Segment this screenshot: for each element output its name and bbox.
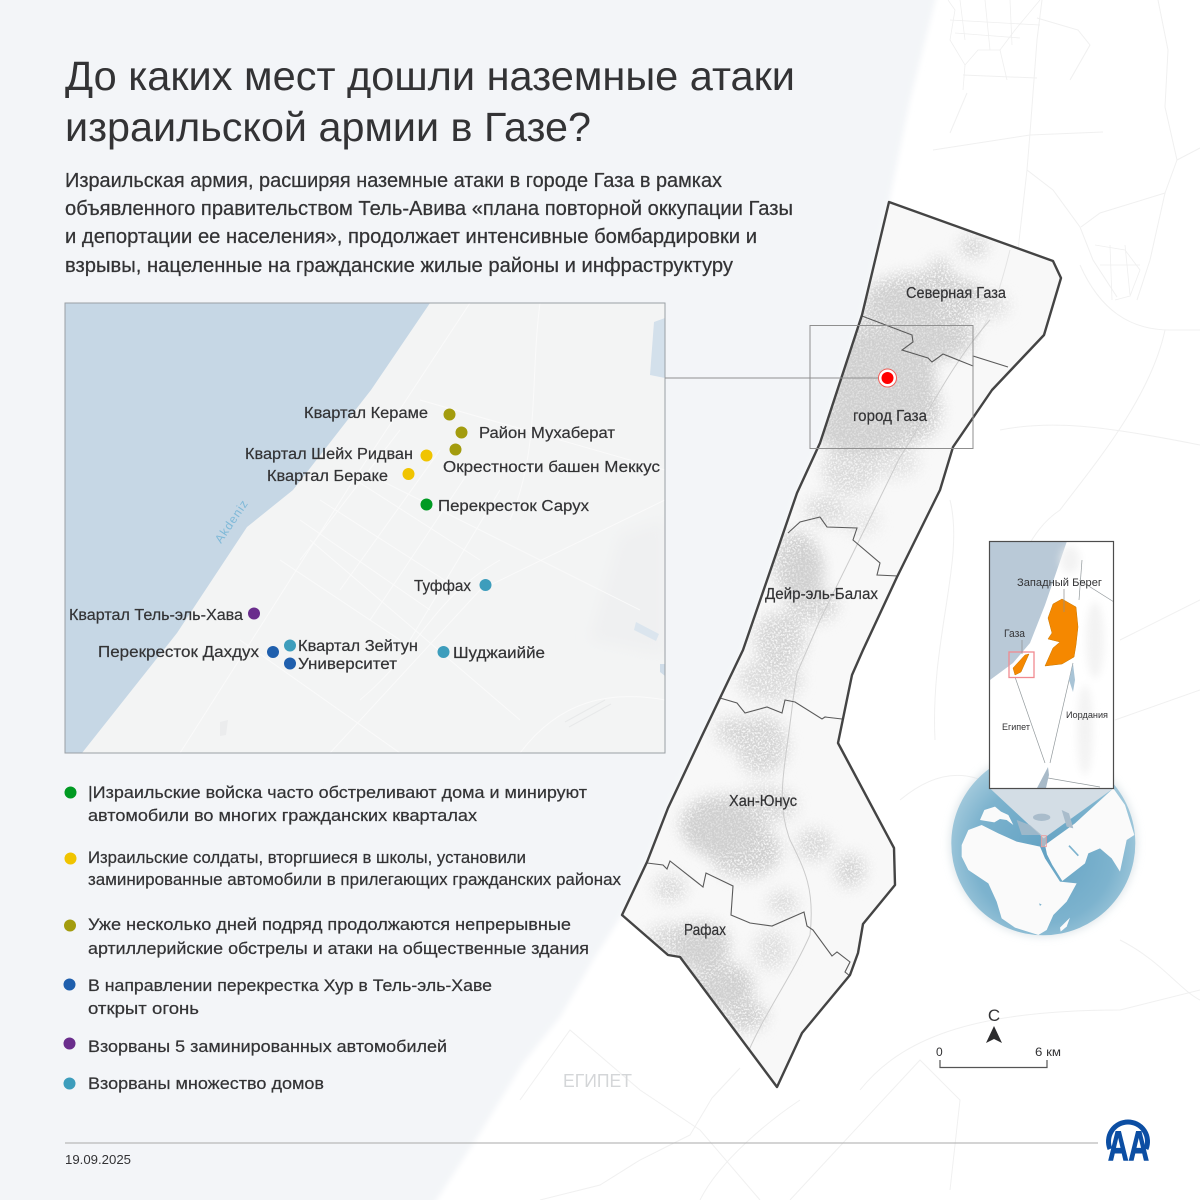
- logo: Anadolu Agency: AA: [1108, 1122, 1149, 1170]
- district boundaries: [647, 316, 1008, 976]
- panel: detail map of Gaza city: [65, 303, 665, 753]
- icon: West Bank: [1045, 599, 1078, 666]
- district labels: Дейр-эль-Балах: [765, 586, 878, 603]
- legend item: blue: [64, 976, 492, 1018]
- subtitle text: Израильская армия, расширяя наземные атаки в городе Газа в рамках: [65, 170, 722, 192]
- locator map: Иордания: [1066, 710, 1108, 720]
- title: [65, 53, 795, 150]
- scale bar: 0: [936, 1045, 943, 1059]
- background land roads: [520, 0, 1200, 1200]
- legend item: blue: открыт огонь: [88, 999, 199, 1018]
- marker: Mukhaberat: Район Мухаберат: [479, 425, 615, 442]
- inset sea: [65, 303, 430, 753]
- legend item: yellow: Израильские солдаты, вторгшиеся в школы, установили: [88, 848, 526, 867]
- scale bar: 6 км: [1035, 1045, 1061, 1059]
- subtitle text: [65, 170, 793, 277]
- marker: Mecca towers: [443, 444, 660, 476]
- legend item: yellow: заминированные автомобили в прилегающих гражданских районах: [88, 870, 621, 889]
- legend item: blue: В направлении перекрестка Хур в Тель-эль-Хаве: [88, 976, 492, 995]
- legend item: teal: Взорваны множество домов: [88, 1074, 324, 1093]
- label: sea name: Akdeniz: [212, 497, 251, 546]
- legend item: purple: Взорваны 5 заминированных автомобилей: [88, 1037, 447, 1056]
- district labels: [684, 285, 1006, 939]
- marker: Shujaiyya: Шуджаиййе: [453, 645, 545, 662]
- legend item: olive: [64, 915, 589, 958]
- locator map: Западный Берег: [1017, 577, 1102, 589]
- locator map: Египет: [1002, 722, 1030, 732]
- district labels: Рафах: [684, 922, 726, 939]
- map: Gaza Strip: [622, 202, 1061, 1087]
- strip outline: [622, 202, 1061, 1087]
- land masses: [962, 788, 1134, 935]
- legend: [64, 783, 621, 1093]
- locator sea: [989, 541, 1067, 681]
- legend item: green: [64, 783, 587, 825]
- marker: Sheikh Radwan: Квартал Шейх Ридван: [245, 446, 413, 463]
- marker: Tel al-Hawa: Квартал Тель-эль-Хава: [69, 607, 243, 624]
- title: До каких мест дошли наземные атаки: [65, 53, 795, 99]
- icon: red location marker: [878, 369, 896, 387]
- globe: [949, 749, 1137, 937]
- icon: Gaza strip: [1013, 654, 1029, 675]
- marker: Berake: Квартал Бераке: [267, 468, 388, 485]
- legend item: green: автомобили во многих гражданских кварталах: [88, 806, 478, 825]
- title: израильской армии в Газе?: [65, 104, 591, 150]
- date: 19.09.2025: [65, 1152, 131, 1167]
- district labels: город Газа: [853, 408, 927, 425]
- label: Egypt: ЕГИПЕТ: [563, 1071, 632, 1091]
- zoom box and leader line: [665, 326, 973, 448]
- north arrow: С: [988, 1006, 1000, 1025]
- legend item: olive: артиллерийские обстрелы и атаки на общественные здания: [88, 939, 589, 958]
- subtitle text: и депортации ее населения», продолжает интенсивные бомбардировки и: [65, 226, 757, 248]
- subtitle text: объявленного правительством Тель-Авива «плана повторной оккупации Газы: [65, 198, 793, 220]
- locator map: Газа: [1004, 628, 1026, 640]
- locator map: [989, 541, 1114, 788]
- scale bar: [936, 1045, 1061, 1068]
- marker: Sarukh junction: Перекресток Сарух: [438, 498, 589, 515]
- subtitle text: взрывы, нацеленные на гражданские жилые районы и инфраструктуру: [65, 255, 733, 277]
- district labels: Северная Газа: [906, 285, 1006, 302]
- legend item: yellow: [64, 848, 621, 889]
- logo: Anadolu Agency: [1108, 1122, 1149, 1170]
- north arrow: [986, 1006, 1002, 1043]
- footer line: [65, 1142, 1098, 1144]
- legend item: olive: Уже несколько дней подряд продолжаются непрерывные: [88, 915, 571, 934]
- background sea: [0, 0, 938, 1200]
- district labels: Хан-Юнус: [729, 793, 797, 810]
- marker: Zeitoun: Квартал Зейтун: [298, 638, 418, 655]
- marker: University: Университет: [298, 656, 397, 673]
- marker: Tuffah: Туффах: [414, 578, 471, 595]
- marker: Dahduh junction: Перекресток Дахдух: [98, 644, 259, 661]
- marker: Kerame: Квартал Кераме: [304, 405, 428, 422]
- legend item: green: |Израильские войска часто обстреливают дома и минируют: [88, 783, 587, 802]
- marker: Mecca towers: Окрестности башен Меккус: [443, 459, 660, 476]
- projection fan: [990, 788, 1113, 838]
